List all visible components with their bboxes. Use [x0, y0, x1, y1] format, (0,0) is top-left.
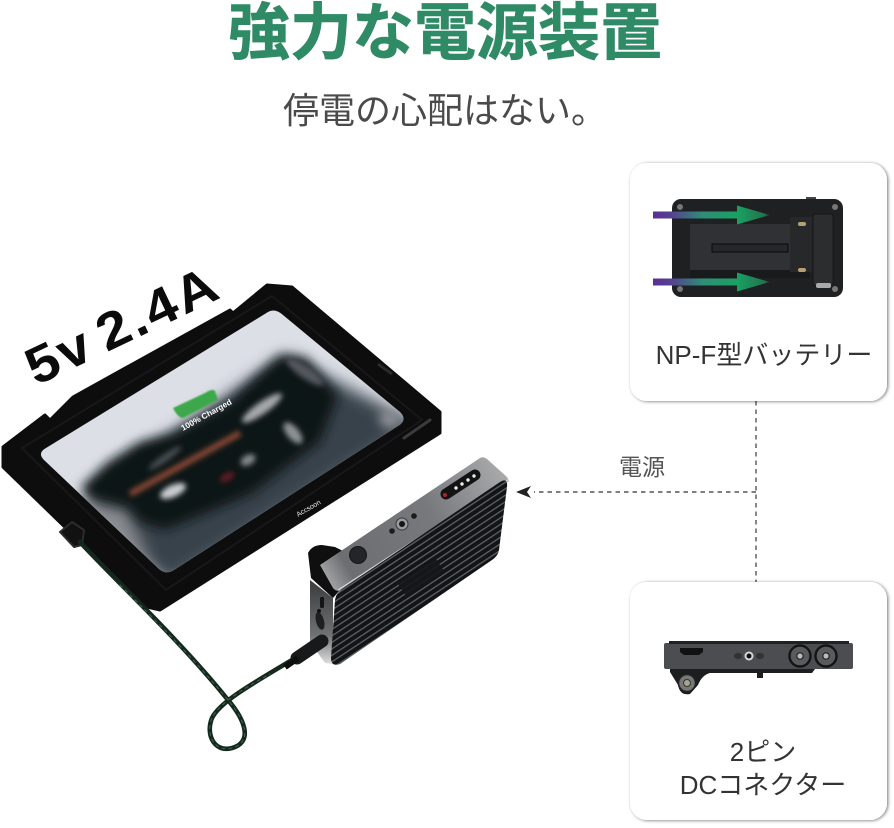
monitor side view [664, 641, 853, 694]
battery level leds [443, 474, 476, 497]
power bank [285, 457, 509, 667]
title: 強力な電源装置 [228, 0, 662, 68]
battery plate [672, 197, 843, 297]
battery indicator: 100% Charged [180, 398, 233, 433]
insertion arrows [653, 206, 770, 292]
brand logo: Accsoon [296, 499, 322, 519]
connector label: DCコネクター [680, 770, 846, 800]
subtitle: 停電の心配はない。 [283, 90, 607, 131]
power label: 電源 [619, 454, 665, 480]
panel: NP-F battery [630, 163, 887, 401]
top face [320, 457, 509, 591]
voltage label: 5v 2.4A [16, 254, 229, 396]
battery label: NP-F型バッテリー [656, 340, 872, 370]
ribbed front face [331, 480, 507, 665]
mount hole [389, 513, 417, 534]
rear bump [308, 545, 345, 598]
panel: DC connector [630, 582, 887, 820]
connector lines [534, 401, 756, 582]
arrow head to power bank [516, 486, 531, 498]
monitor in cage [3, 285, 440, 610]
button [350, 546, 366, 564]
charging plug [297, 641, 322, 658]
monitor screen [40, 310, 404, 572]
cable [60, 522, 292, 749]
side face [310, 580, 333, 664]
connector label: 2ピン [730, 737, 796, 767]
